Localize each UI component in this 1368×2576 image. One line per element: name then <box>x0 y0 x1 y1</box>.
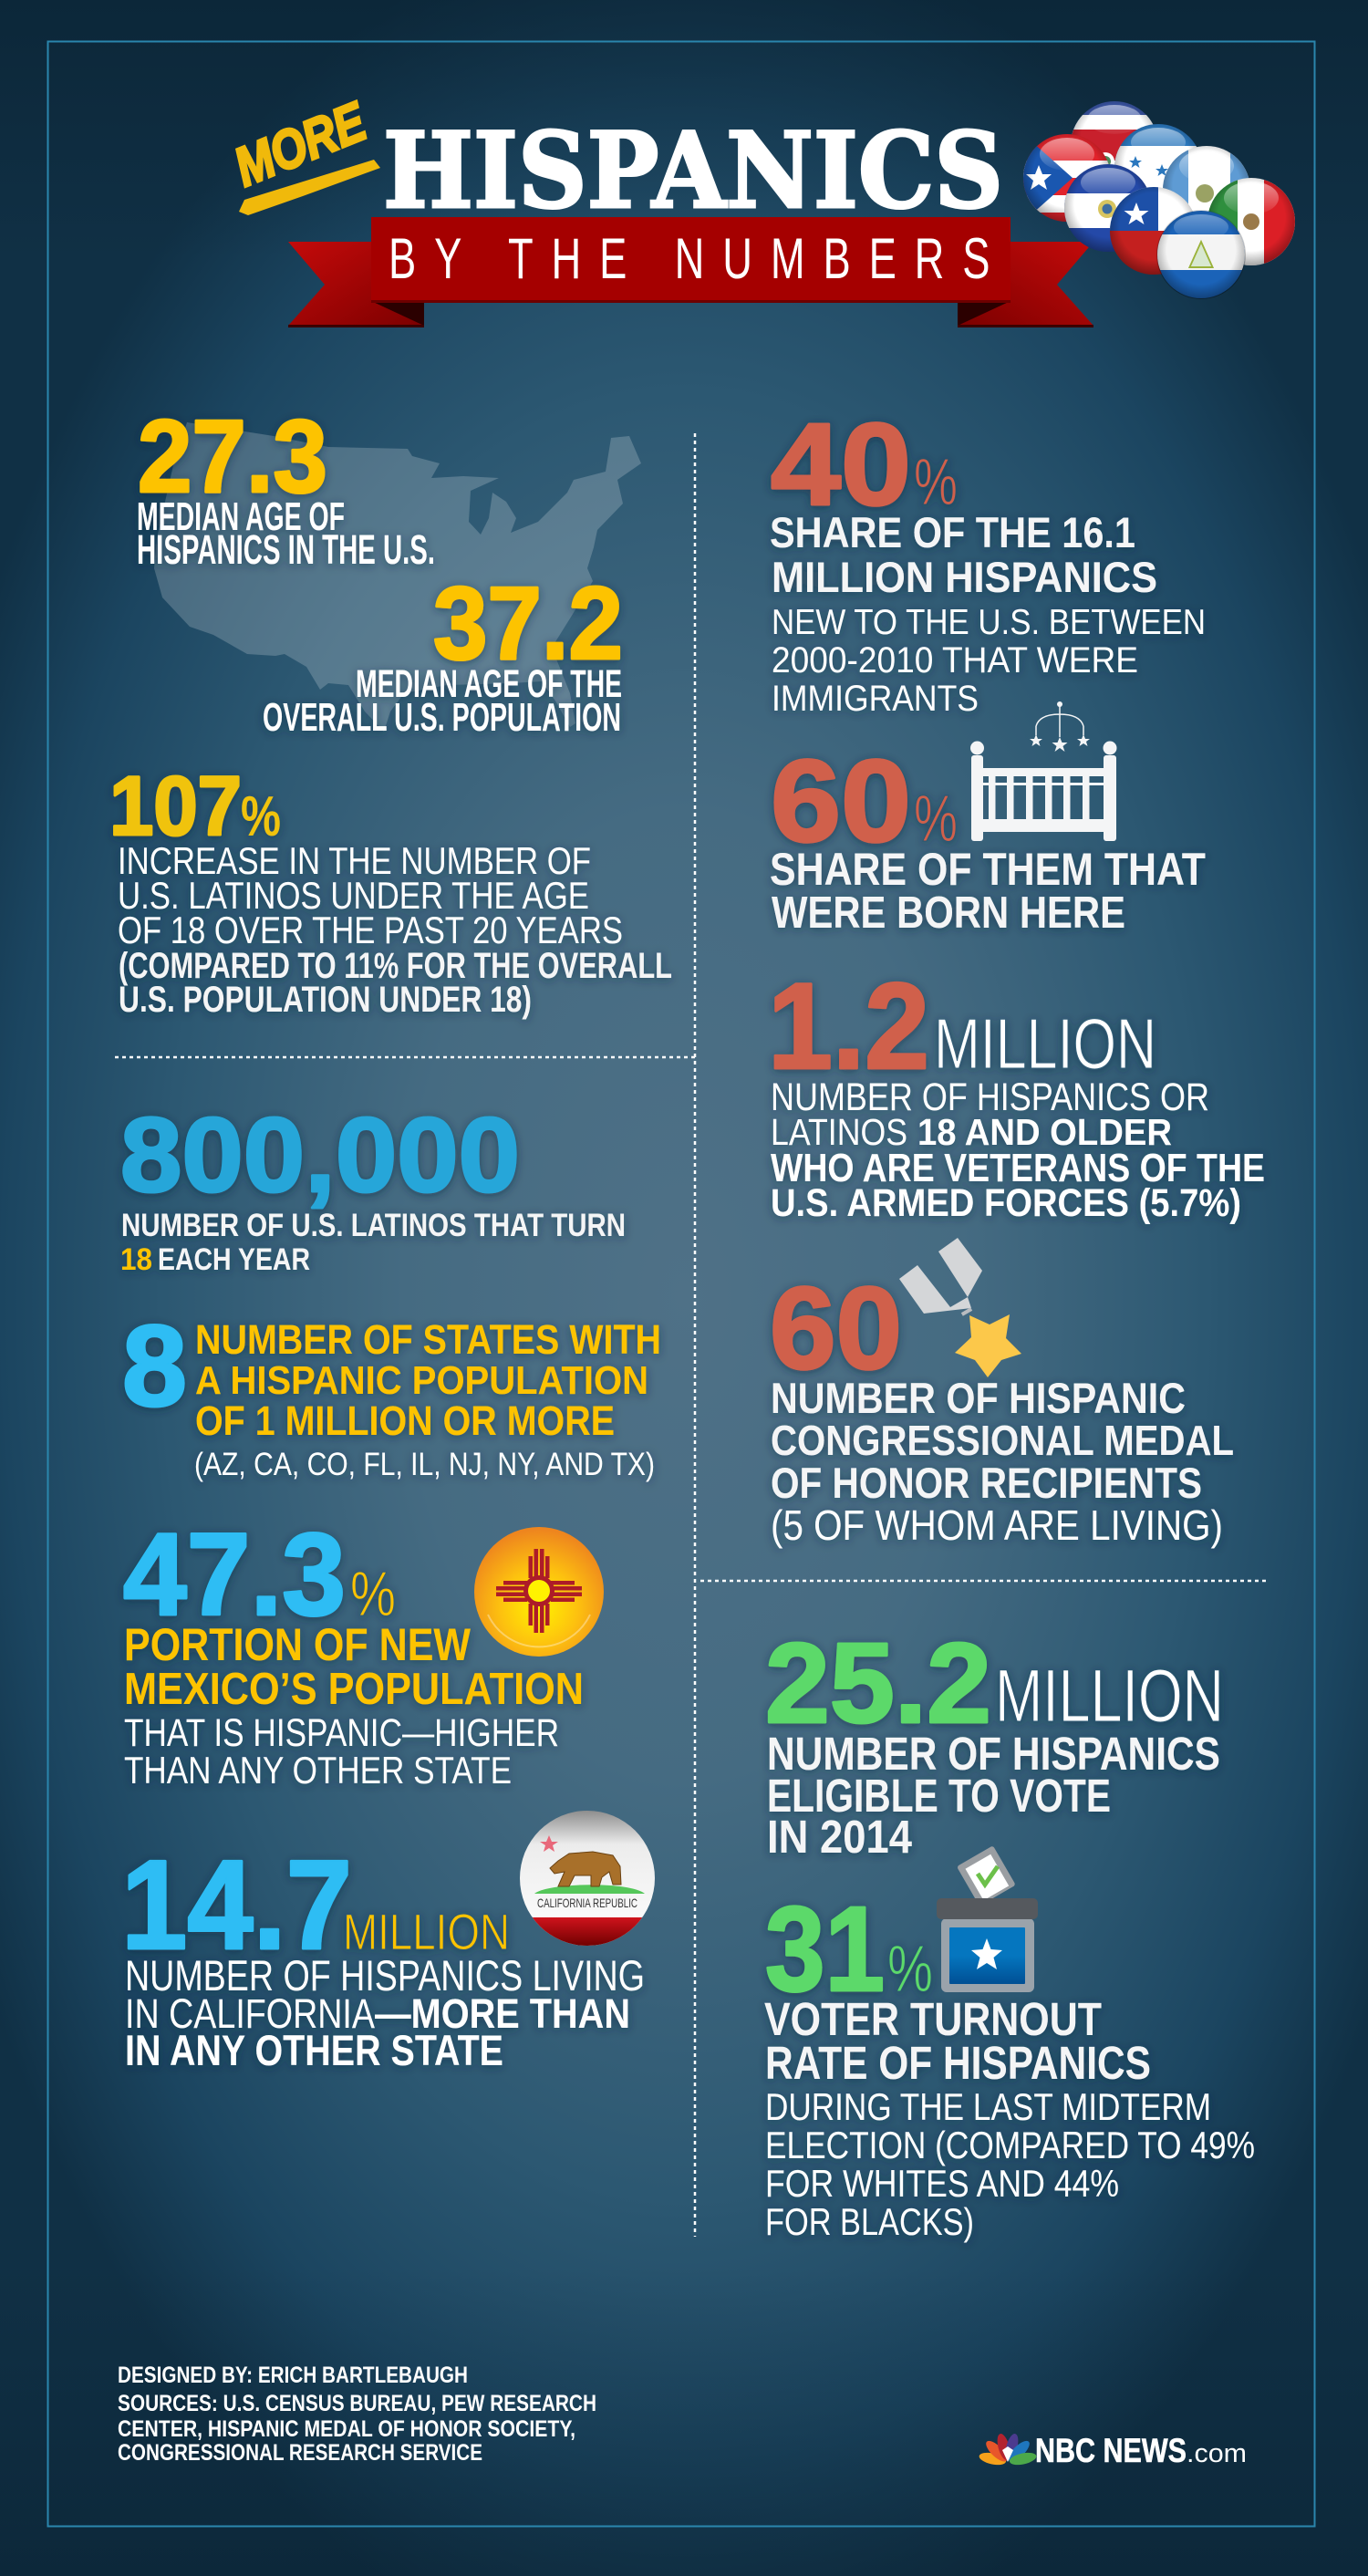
icon: ballot box <box>937 1845 1038 1992</box>
stat: 40%: IMMIGRANTS <box>772 679 979 719</box>
stat: 31% voter turnout: ELECTION (COMPARED TO 49% <box>765 2124 1255 2166</box>
flag: Puerto Rico <box>1023 134 1111 222</box>
stat: 8 states <box>122 1302 661 1482</box>
stat: 25.2 million eligible voters: NUMBER OF HISPANICS <box>767 1728 1220 1780</box>
heading: HISPANICS: HISPANICS <box>383 109 1003 232</box>
stat: 60% born here: SHARE OF THEM THAT <box>770 844 1206 895</box>
flag: Guatemala <box>1163 146 1249 212</box>
stat: 25.2 million eligible voters: IN 2014 <box>767 1811 913 1863</box>
stat: 1.2 million veterans: NUMBER OF HISPANICS OR <box>771 1075 1209 1119</box>
stat: 60% born here <box>770 736 1206 938</box>
flag: Costa Rica <box>1073 101 1153 165</box>
stat: 31% voter turnout: FOR WHITES AND 44% <box>765 2162 1119 2205</box>
stat: 47.3% New Mexico: % <box>350 1558 396 1629</box>
stat: 31% voter turnout: VOTER TURNOUT <box>764 1993 1102 2045</box>
stat: 40%: 2000-2010 THAT WERE <box>772 640 1138 680</box>
ribbon text: BY THE NUMBERS <box>389 226 990 291</box>
credits and sources <box>118 2363 596 2466</box>
stat: 60 medal of honor <box>770 1263 1234 1549</box>
stat: 37.2 median age overall <box>263 566 623 740</box>
stat: 14.7 million California: IN CALIFORNIA <box>125 1990 375 2037</box>
stat: 1.2 million veterans: LATINOS <box>771 1111 907 1153</box>
stat: 8 states: OF 1 MILLION OR MORE <box>195 1397 615 1444</box>
icon: medal of honor <box>899 1238 1021 1377</box>
title block <box>226 90 1295 327</box>
stat: 14.7 million California: IN ANY OTHER STATE <box>125 2026 503 2074</box>
stat: 8 states: 8 <box>122 1302 187 1430</box>
flag: Honduras <box>1114 124 1197 188</box>
stat: 27.3 median age of Hispanics: 27.3 <box>138 399 327 514</box>
stat: 37.2 median age overall: MEDIAN AGE OF THE <box>356 662 622 706</box>
stat: 800,000: NUMBER OF U.S. LATINOS THAT TURN <box>121 1208 626 1243</box>
flag: Mexico <box>1207 178 1295 265</box>
flag cluster <box>1023 101 1295 300</box>
stat: 40%: MILLION HISPANICS <box>772 553 1157 601</box>
dotted dividers <box>115 433 1266 2237</box>
credits and sources: SOURCES: U.S. CENSUS BUREAU, PEW RESEARCH <box>118 2391 596 2416</box>
stat: 27.3 median age of Hispanics: HISPANICS IN THE U.S. <box>137 526 435 573</box>
stat: 25.2 million eligible voters: MILLION <box>995 1655 1224 1738</box>
stat: 107%: U.S. POPULATION UNDER 18) <box>119 980 532 1020</box>
stat: 107% <box>109 760 672 1020</box>
map of the United States <box>154 422 641 732</box>
stat: 60 medal of honor: 60 <box>770 1263 902 1394</box>
stat: 800,000: 18 <box>120 1242 152 1277</box>
stat: 47.3% New Mexico: PORTION OF NEW <box>124 1619 472 1670</box>
stat: 14.7 million California: NUMBER OF HISPANICS LIVING <box>125 1951 645 2000</box>
stat: 14.7 million California <box>121 1834 645 2074</box>
stat: 1.2 million veterans <box>768 959 1265 1225</box>
stat: 107%: 107 <box>109 760 242 853</box>
stat: 1.2 million veterans: MILLION <box>934 1003 1156 1084</box>
icon: California republic badge <box>520 1811 655 1947</box>
stat: 40%: SHARE OF THE 16.1 <box>770 508 1135 556</box>
stat: 800,000: EACH YEAR <box>158 1242 310 1277</box>
flag: Nicaragua <box>1156 209 1247 300</box>
stat: 40%: % <box>914 446 958 519</box>
stat: 107%: U.S. LATINOS UNDER THE AGE <box>118 874 589 917</box>
stat: 27.3 median age of Hispanics: MEDIAN AGE OF <box>137 494 345 539</box>
stat: 60% born here: 60 <box>771 736 911 867</box>
credits and sources: CONGRESSIONAL RESEARCH SERVICE <box>118 2440 482 2466</box>
stat: 60 medal of honor: (5 OF WHOM ARE LIVING) <box>771 1501 1223 1549</box>
credits and sources: DESIGNED BY: ERICH BARTLEBAUGH <box>118 2363 468 2388</box>
stat: 14.7 million California: —MORE THAN <box>375 1990 630 2037</box>
icon: California republic badge: CALIFORNIA REPUBLIC <box>537 1896 637 1910</box>
stat: 14.7 million California: 14.7 <box>121 1834 352 1976</box>
stat: 60 medal of honor: CONGRESSIONAL MEDAL <box>771 1417 1234 1464</box>
flourish: MORE: MORE <box>226 90 376 198</box>
stat: 40% <box>770 400 1206 719</box>
stat: 1.2 million veterans: WHO ARE VETERANS OF THE <box>771 1146 1265 1190</box>
stat: 37.2 median age overall: OVERALL U.S. POPULATION <box>263 695 621 740</box>
stat: 8 states: (AZ, CA, CO, FL, IL, NJ, NY, AND TX) <box>194 1447 655 1482</box>
stat: 107%: OF 18 OVER THE PAST 20 YEARS <box>118 909 623 951</box>
stat: 107%: (COMPARED TO 11% FOR THE OVERALL <box>119 946 672 986</box>
ribbon banner <box>288 217 1093 327</box>
stat: 47.3% New Mexico: THAN ANY OTHER STATE <box>124 1749 512 1792</box>
stat: 25.2 million eligible voters <box>765 1621 1224 1863</box>
stat: 31% voter turnout: 31 <box>765 1882 885 2016</box>
stat: 800,000 <box>120 1096 626 1277</box>
stat: 107%: INCREASE IN THE NUMBER OF <box>118 839 591 882</box>
stat: 8 states: A HISPANIC POPULATION <box>195 1358 648 1403</box>
stat: 107%: % <box>241 785 281 848</box>
stat: 27.3 median age of Hispanics <box>137 399 435 573</box>
stat: 60 medal of honor: NUMBER OF HISPANIC <box>771 1374 1186 1422</box>
stat: 47.3% New Mexico <box>123 1510 584 1792</box>
stat: 1.2 million veterans: U.S. ARMED FORCES (5.7%) <box>771 1181 1241 1225</box>
stat: 31% voter turnout <box>764 1882 1255 2243</box>
stat: 25.2 million eligible voters: ELIGIBLE TO VOTE <box>767 1770 1111 1822</box>
logo: NBC News: .com <box>1187 2439 1247 2468</box>
stat: 8 states: NUMBER OF STATES WITH <box>195 1316 661 1363</box>
flag: Chile <box>1110 187 1197 275</box>
stat: 800,000: 800,000 <box>120 1096 520 1214</box>
stat: 1.2 million veterans: 1.2 <box>768 959 929 1095</box>
stat: 14.7 million California: MILLION <box>343 1903 510 1960</box>
icon: crib with mobile <box>970 701 1116 841</box>
stat: 31% voter turnout: % <box>887 1933 933 2006</box>
stat: 1.2 million veterans: 18 AND OLDER <box>917 1111 1172 1153</box>
flag: El Salvador <box>1064 164 1152 252</box>
icon: New Mexico zia badge <box>474 1527 604 1657</box>
stat: 47.3% New Mexico: THAT IS HISPANIC—HIGHER <box>124 1711 559 1755</box>
stat: 40%: NEW TO THE U.S. BETWEEN <box>772 603 1206 642</box>
stat: 47.3% New Mexico: 47.3 <box>123 1510 346 1640</box>
stat: 47.3% New Mexico: MEXICO’S POPULATION <box>124 1665 584 1714</box>
stat: 31% voter turnout: RATE OF HISPANICS <box>765 2037 1151 2089</box>
logo: NBC News <box>978 2432 1247 2469</box>
logo: NBC News: NBC NEWS <box>1035 2432 1187 2469</box>
stat: 60% born here: % <box>914 783 958 856</box>
stat: 60% born here: WERE BORN HERE <box>772 888 1125 938</box>
stat: 25.2 million eligible voters: 25.2 <box>765 1621 991 1747</box>
credits and sources: CENTER, HISPANIC MEDAL OF HONOR SOCIETY, <box>118 2416 575 2442</box>
stat: 40%: 40 <box>771 400 911 530</box>
stat: 60 medal of honor: OF HONOR RECIPIENTS <box>771 1459 1202 1507</box>
stat: 31% voter turnout: DURING THE LAST MIDTERM <box>765 2085 1211 2128</box>
icon: peacock <box>978 2433 1038 2467</box>
stat: 31% voter turnout: FOR BLACKS) <box>765 2200 974 2243</box>
stat: 37.2 median age overall: 37.2 <box>433 566 623 680</box>
